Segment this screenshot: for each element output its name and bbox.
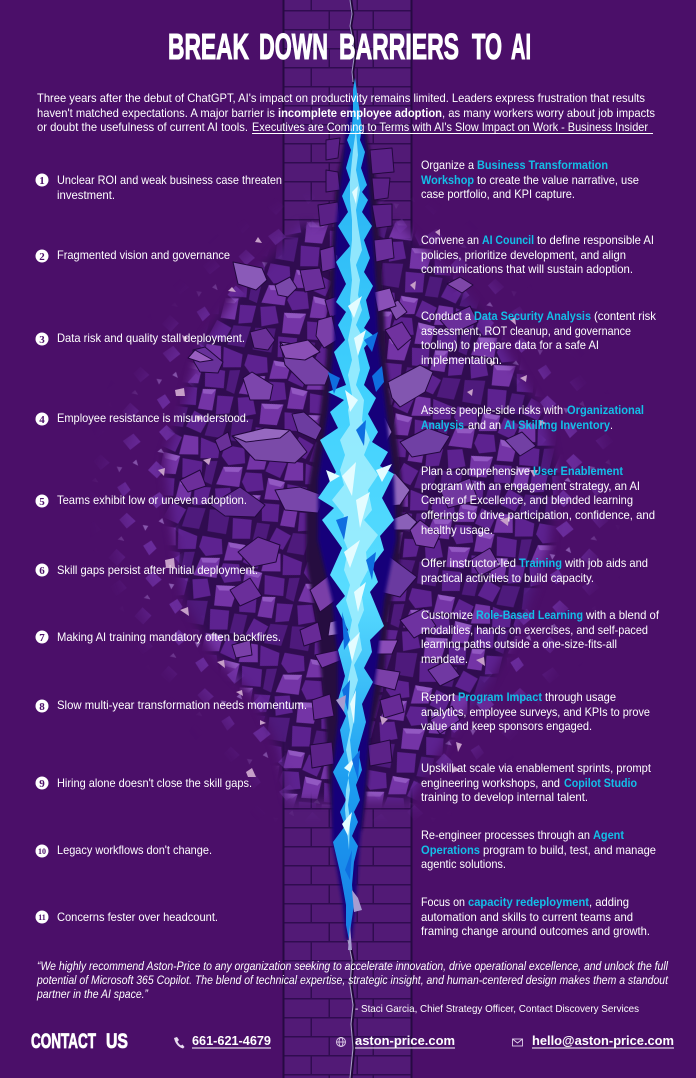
solution 6 (421, 556, 648, 585)
solution 3: (content risk (594, 309, 657, 323)
solution 3: tooling) to prepare data for a safe AI (421, 338, 599, 352)
barrier 10: 10 (38, 847, 46, 856)
intro text (37, 91, 655, 134)
solution 7: mandate. (421, 652, 468, 666)
solution 10: program to build, test, and manage (483, 843, 656, 857)
solution 6: Training (519, 556, 562, 570)
solution 2: policies, prioritize development, and align (421, 248, 626, 262)
solution 4: AI Skilling Inventory (504, 418, 610, 432)
solution 9: Upskill at scale via enablement sprints, prompt (421, 761, 652, 775)
barrier 11: 11 (38, 913, 46, 922)
solution 5 (421, 464, 655, 537)
barrier 1: Unclear ROI and weak business case threaten (57, 173, 282, 187)
icon: globe (336, 1038, 346, 1046)
barrier 4: 4 (39, 414, 45, 426)
barrier 9: 9 (39, 778, 45, 790)
solution 1: to create the value narrative, use (477, 173, 639, 187)
solution 8: value and keep sponsors engaged. (421, 719, 592, 733)
solution 4: . (610, 418, 613, 432)
barrier 2: 2 (39, 251, 45, 263)
title (168, 26, 531, 67)
barrier 7: 7 (39, 632, 45, 644)
title: BARRIERS (339, 26, 459, 67)
crack thin top (350, 0, 354, 82)
solution 6: practical activities to build capacity. (421, 571, 594, 585)
icon: envelope (512, 1039, 522, 1046)
crack inner light (332, 130, 378, 850)
barrier 6: Skill gaps persist after initial deployment. (57, 563, 258, 577)
solution 1: Organize a (421, 158, 474, 172)
solution 8: Report (421, 690, 456, 704)
title: AI (511, 26, 531, 67)
intro text: , as many workers worry about job impacts (442, 106, 655, 120)
crack shadow (318, 100, 396, 940)
contact us heading: CONTACT (31, 1030, 96, 1053)
crack lower slivers (336, 695, 362, 950)
solution 8: through usage (545, 690, 616, 704)
testimonial quote: partner in the AI space.” (36, 987, 149, 1001)
dark gap around crack (306, 130, 404, 830)
solution 2: communications that will sustain adoption. (421, 262, 633, 276)
solution 3: implementation. (421, 353, 502, 367)
testimonial quote (36, 959, 669, 1001)
solution 4: and an (468, 418, 501, 432)
crack facets blue (328, 332, 384, 880)
barrier 5: Teams exhibit low or uneven adoption. (57, 493, 247, 507)
barrier 2: Fragmented vision and governance (57, 248, 230, 262)
solution 7: modalities, hands on exercises, and self-paced (421, 623, 648, 637)
barrier 1: 1 (39, 175, 45, 187)
solution 10: Operations (421, 843, 480, 857)
solution 2: AI Council (482, 233, 534, 247)
stone chips (158, 229, 546, 777)
contact website: aston-price.com (355, 1033, 455, 1048)
barrier 9: Hiring alone doesn't close the skill gaps. (57, 776, 252, 790)
glowing crack (318, 0, 396, 1078)
solution 3: assessment, ROT cleanup, and governance (421, 324, 631, 338)
solution 8 (421, 690, 650, 733)
contact phone: 661-621-4679 (192, 1033, 271, 1048)
solution 11: capacity redeployment (468, 895, 589, 909)
barrier 7: Making AI training mandatory often backfires. (57, 630, 281, 644)
intro text: Executives are Coming to Terms with AI's Slow Impact on Work - Business Insider (252, 120, 648, 134)
testimonial attribution: - Staci Garcia, Chief Strategy Officer, Contact Discovery Services (355, 1003, 639, 1015)
solution 5: User Enablement (533, 464, 623, 478)
solution 3: Data Security Analysis (474, 309, 591, 323)
solution 2: to define responsible AI (537, 233, 654, 247)
solution 6: with job aids and (564, 556, 648, 570)
solution 3 (421, 309, 657, 367)
solution 10 (421, 828, 656, 871)
solution 1 (421, 158, 639, 201)
solution 7: Role-Based Learning (476, 608, 583, 622)
solution 6: Offer instructor-led (421, 556, 516, 570)
solution 9 (421, 761, 652, 804)
intro text: or doubt the usefulness of current AI tools. (37, 120, 248, 134)
title: TO (472, 26, 502, 67)
solution 2: Convene an (421, 233, 479, 247)
barrier 8: Slow multi-year transformation needs momentum. (57, 698, 307, 712)
title: DOWN (259, 26, 328, 67)
barrier 4: Employee resistance is misunderstood. (57, 411, 249, 425)
crack main body (318, 78, 394, 940)
solution 9: engineering workshops, and (421, 776, 560, 790)
barrier 6: 6 (39, 565, 45, 577)
crack thin bottom (348, 940, 353, 1078)
crack facets white (326, 186, 392, 836)
large broken stones (180, 138, 536, 768)
solution 4: Assess people-side risks with (421, 403, 563, 417)
solution 10: Re-engineer processes through an (421, 828, 590, 842)
intro text: incomplete employee adoption (278, 106, 442, 120)
solution 7 (421, 608, 660, 666)
solution 1: Business Transformation (477, 158, 608, 172)
intro text: Three years after the debut of ChatGPT, AI's impact on productivity remains limited. Leaders express frustration that results (37, 91, 645, 105)
solution 11: , adding (589, 895, 629, 909)
solution 4: Analysis (421, 418, 464, 432)
solution 8: analytics, employee surveys, and KPIs to prove (421, 705, 650, 719)
solution 5: program with an engagement strategy, an AI (421, 479, 640, 493)
intro text: haven't matched expectations. A major barrier is (37, 106, 275, 120)
solution 11 (421, 895, 650, 938)
crack dark top (351, 0, 355, 84)
solution 7: learning paths outside a one-size-fits-all (421, 637, 617, 651)
solution 3: Conduct a (421, 309, 471, 323)
icon: phone (174, 1037, 184, 1048)
contact us heading: US (106, 1030, 128, 1053)
solution 1: case portfolio, and KPI capture. (421, 187, 575, 201)
barrier 1: investment. (57, 188, 115, 202)
solution 1: Workshop (421, 173, 474, 187)
solution 2 (421, 233, 654, 276)
solution 8: Program Impact (458, 690, 542, 704)
title: BREAK (168, 26, 249, 67)
solution 5: offerings to drive participation, confidence, and (421, 508, 655, 522)
solution 11: framing change around outcomes and growth. (421, 924, 650, 938)
barrier 8: 8 (39, 701, 45, 713)
barrier 3: 3 (39, 334, 45, 346)
shattered rubble (90, 130, 620, 830)
solution 11: automation and skills to current teams and (421, 910, 633, 924)
solution 11: Focus on (421, 895, 465, 909)
solution 5: Center of Excellence, and blended learning (421, 493, 633, 507)
brick wall (282, 0, 412, 1078)
solution 7: Customize (421, 608, 473, 622)
barrier 10: Legacy workflows don't change. (57, 843, 212, 857)
solution 7: with a blend of (585, 608, 660, 622)
solution 9: Copilot Studio (564, 776, 637, 790)
solution 5: healthy usage. (421, 523, 493, 537)
barrier 11: Concerns fester over headcount. (57, 910, 218, 924)
solution 5: Plan a comprehensive (421, 464, 530, 478)
solution 10: agentic solutions. (421, 857, 506, 871)
solution 10: Agent (593, 828, 624, 842)
solution 4 (421, 403, 644, 432)
barrier 5: 5 (39, 496, 45, 508)
barrier 1 (36, 173, 282, 202)
crack dark bottom (349, 940, 354, 1078)
solution 4: Organizational (567, 403, 644, 417)
solution 9: training to develop internal talent. (421, 790, 588, 804)
barrier 3: Data risk and quality stall deployment. (57, 331, 245, 345)
contact email: hello@aston-price.com (532, 1033, 674, 1048)
